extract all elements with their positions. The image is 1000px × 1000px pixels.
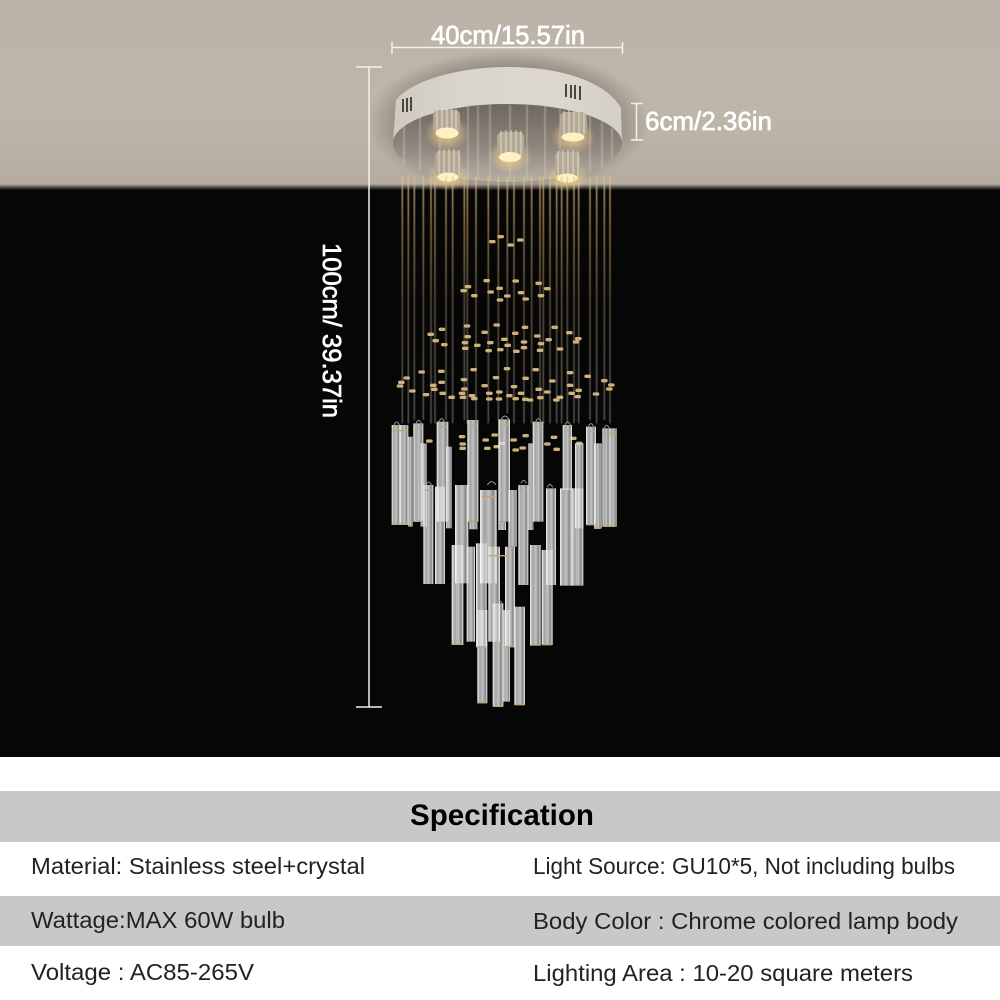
light: bottom left — [426, 149, 470, 191]
dark wall background — [0, 190, 1000, 757]
light: top left — [425, 108, 469, 151]
spec: material: Material: Stainless steel+crystal — [31, 853, 365, 879]
crystal chandelier drop — [398, 177, 613, 450]
row 2 shading — [0, 896, 1000, 946]
canopy rim — [393, 67, 622, 143]
spec: voltage: Voltage : AC85-265V — [31, 959, 255, 985]
spec: body color: Body Color : Chrome colored lamp body — [533, 908, 959, 934]
spec: lighting area: Lighting Area : 10-20 square meters — [533, 960, 913, 986]
light: centre — [488, 130, 532, 174]
specification heading bar — [0, 791, 1000, 842]
width label: 40cm/15.57in — [431, 20, 585, 50]
underside reflections — [404, 105, 612, 181]
ceiling background — [0, 0, 1000, 194]
crystal tubes — [392, 416, 617, 707]
dimension: total height — [317, 67, 382, 707]
total height label: 100cm/ 39.37in — [317, 243, 347, 418]
tube hanger loops — [394, 416, 609, 603]
crystal beads — [398, 237, 613, 450]
light: bottom right — [545, 150, 589, 192]
canopy vents — [403, 84, 580, 112]
spec: wattage: Wattage:MAX 60W bulb — [31, 907, 285, 933]
second tier tubes — [423, 485, 583, 586]
tube gold caps — [392, 425, 615, 706]
top tier tubes — [392, 419, 617, 530]
suspension wires — [402, 177, 610, 423]
dimension: canopy height — [631, 104, 772, 140]
third tier tubes — [452, 543, 553, 647]
canopy height label: 6cm/2.36in — [645, 106, 772, 136]
specification section — [0, 757, 1000, 1000]
dimension: width — [392, 20, 623, 54]
mirrored underside — [393, 104, 622, 182]
bottom tier tubes — [477, 603, 525, 707]
spec: light source: Light Source: GU10*5, Not including bulbs — [533, 853, 955, 879]
specification heading: Specification — [410, 799, 594, 832]
ceiling-mounted canopy — [393, 67, 622, 192]
light: top right — [551, 110, 595, 154]
